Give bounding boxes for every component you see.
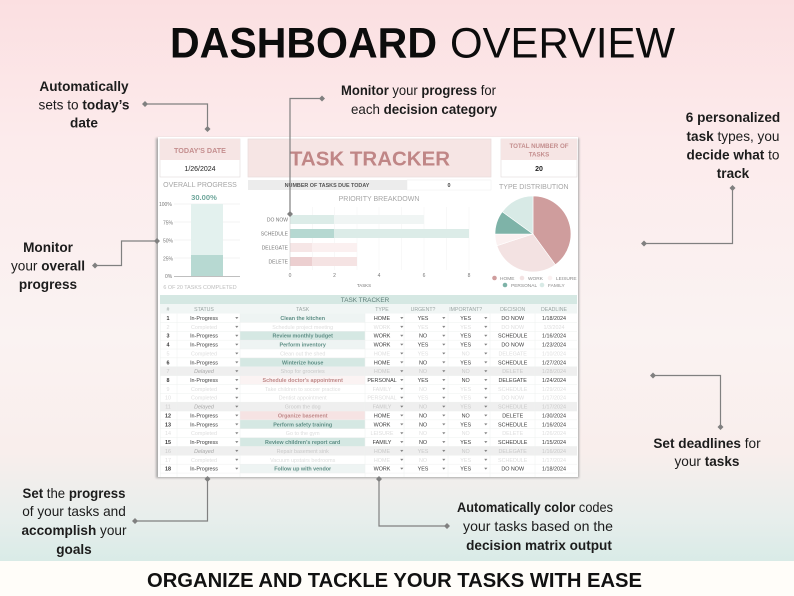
row 1: YES [460,316,471,322]
row 10: DO NOW [501,396,525,402]
total tasks card [501,139,577,177]
row 13: In-Progress [190,422,218,428]
type distribution pie chart: LEISURE [556,276,577,282]
priority breakdown chart: TASKS [357,283,371,288]
row 15: 15 [165,440,171,446]
row 14: NO [419,431,427,437]
callout: set progress: goals [56,542,92,557]
tracker title: TASK TRACKER [290,148,450,170]
row 1: Clean the kitchen [280,316,325,322]
row 7: HOME [374,369,390,375]
callout: task types: track [717,166,750,181]
row 1: 1/18/2024 [542,316,566,322]
table header row: URGENT? [411,307,436,313]
row 5: Clean out the shed [280,351,325,357]
overall progress chart: 50% [163,238,174,244]
row 17: Vacuum upstairs bedrooms [270,458,336,464]
callout: overall progress: your overall [11,258,85,274]
row 3: Review monthly budget [272,334,333,340]
row 15: YES [460,440,471,446]
overall progress chart: 6 OF 20 TASKS COMPLETED [163,285,237,291]
callout: decision category progress: Monitor your progress for [341,83,496,98]
row 16: NO [462,449,470,455]
row 16: YES [418,449,429,455]
row 12: NO [419,413,427,419]
row 18 [165,464,566,473]
row 5: 1/10/2024 [542,351,566,357]
table header row: IMPORTANT? [449,307,482,313]
row 11: SCHEDULE [498,405,528,411]
row 1 [166,314,566,322]
priority breakdown chart: 6 [423,273,426,279]
row 4: In-Progress [190,343,218,349]
arrow: today's date [142,101,210,132]
row 10: Completed [191,396,217,402]
callout: set progress: of your tasks and [22,504,126,519]
arrow: deadlines [650,372,724,430]
row 1: DO NOW [501,316,525,322]
row 4: WORK [374,343,391,349]
row 9: Completed [191,387,217,393]
row 7: 7 [166,369,170,375]
row 11: NO [419,405,427,411]
priority breakdown chart: DO NOW [267,218,288,224]
row 14: LEISURE [370,431,394,437]
callout: color codes: your tasks based on the [463,519,613,534]
tracker title [248,139,491,177]
priority breakdown chart: DELETE [269,260,289,266]
overall progress chart: 75% [163,220,174,226]
callout: today's date: sets to today’s [39,98,129,112]
row 4: YES [460,343,471,349]
total tasks card: 20 [535,166,543,173]
type distribution pie chart: FAMILY [548,283,566,289]
row 4: YES [418,343,429,349]
row 2: Schedule project meeting [272,325,333,331]
row 10: YES [418,396,429,402]
callout: overall progress [11,240,85,292]
row 16: DELEGATE [499,449,527,455]
row 16: 1/16/2024 [542,449,566,455]
table header row: DEADLINE [541,307,568,313]
row 6: NO [419,360,427,366]
row 13: Perform safety training [273,422,332,428]
row 18: Follow up with vendor [274,467,332,473]
total tasks card: TASKS [529,152,549,158]
row 18: DO NOW [501,467,525,473]
row 2 [166,325,564,331]
callout: task types: task types, you [687,129,779,144]
table title band: TASK TRACKER [341,297,390,304]
row 8: PERSONAL [367,378,397,384]
type distribution pie chart: TYPE DISTRIBUTION [499,184,569,191]
row 4 [166,340,566,349]
row 12: Organize basement [278,413,328,419]
row 18: 18 [165,467,171,473]
row 12: 1/30/2024 [542,413,566,419]
task tracker table [160,295,577,477]
table header row: TASK [296,307,310,313]
row 6: 1/27/2024 [542,360,566,366]
row 11: Delayed [194,405,215,411]
overall progress chart: 100% [159,202,172,208]
priority breakdown chart: 8 [468,273,471,279]
row 10: PERSONAL [367,396,397,402]
row 18: 1/18/2024 [542,467,566,473]
row 1: HOME [374,316,390,322]
type distribution pie chart [492,184,577,289]
row 7: NO [462,369,470,375]
callout: color codes [457,500,613,553]
total tasks card: TOTAL NUMBER OF [509,143,569,150]
row 8: 8 [166,378,170,384]
row 10: 10 [165,396,171,402]
row 9: 1/29/2024 [542,387,566,393]
row 3: WORK [374,334,391,340]
table header row: TYPE [375,307,389,313]
arrow: set progress [132,476,210,524]
title: DASHBOARD [170,20,437,68]
row 1: 1 [166,316,170,322]
tasks due today bar: NUMBER OF TASKS DUE TODAY [285,183,370,189]
row 14 [165,431,566,437]
row 17 [165,458,566,464]
callout: deadlines: your tasks [674,454,740,469]
today's date card: TODAY'S DATE [174,146,226,155]
priority breakdown chart: DELEGATE [262,246,289,252]
row 10: 1/17/2024 [542,396,566,402]
row 12: DELETE [502,413,524,419]
row 5: YES [418,351,429,357]
row 8: YES [418,378,429,384]
row 2: 1/3/2024 [544,325,564,331]
row 17: NO [419,458,427,464]
row 12: NO [462,413,470,419]
callout: overall progress: progress [19,277,77,292]
tasks due today bar [248,180,491,190]
row 6: 6 [166,360,170,366]
arrow: overall progress [92,238,160,268]
row 2: YES [418,325,429,331]
priority breakdown chart: 2 [333,273,336,279]
row 11: FAMILY [373,405,392,411]
row 6 [166,358,566,367]
row 3: In-Progress [190,334,218,340]
row 4: DO NOW [501,343,525,349]
row 16: Delayed [194,449,215,455]
type distribution pie chart: HOME [500,276,514,282]
row 15: SCHEDULE [498,440,528,446]
row 11: Groom the dog [285,405,321,411]
title: OVERVIEW [450,20,675,68]
tasks due today bar: 0 [448,183,450,189]
row 17: 1/17/2024 [542,458,566,464]
row 6: In-Progress [190,360,218,366]
row 12: In-Progress [190,413,218,419]
row 13 [165,420,566,429]
overall progress chart: 30.00% [191,193,217,202]
priority breakdown chart: SCHEDULE [261,232,289,238]
row 2: 2 [166,325,170,331]
row 6: SCHEDULE [498,360,528,366]
row 5: Completed [191,351,217,357]
row 11: 1/17/2024 [542,405,566,411]
row 13: 1/16/2024 [542,422,566,428]
row 13: YES [460,422,471,428]
row 9: YES [460,387,471,393]
row 7 [160,367,577,376]
bottom banner: ORGANIZE AND TACKLE YOUR TASKS WITH EASE [147,570,642,592]
row 14: 1/26/2024 [542,431,566,437]
today's date card: 1/26/2024 [184,166,216,173]
row 5: 5 [166,351,170,357]
table header row [160,304,577,314]
row 3: 3 [166,334,170,340]
callout: overall progress: Monitor [23,240,74,255]
row 13: NO [419,422,427,428]
row 5: DELEGATE [499,351,527,357]
row 10: YES [460,396,471,402]
row 11 [160,402,577,411]
row 2: YES [460,325,471,331]
row 9: NO [419,387,427,393]
row 11: 11 [165,405,171,411]
row 9: FAMILY [373,387,392,393]
table header row: STATUS [194,307,214,313]
row 1: YES [418,316,429,322]
row 12 [165,411,566,420]
row 5: HOME [374,351,390,357]
row 9: 9 [166,387,170,393]
arrow: decision category progress [287,96,325,217]
row 15: NO [419,440,427,446]
priority breakdown chart: 0 [289,273,292,279]
table title band [160,295,577,304]
overall progress chart: 25% [163,256,174,262]
row 8: DELEGATE [499,378,527,384]
row 2: DO NOW [501,325,525,331]
row 18: YES [418,467,429,473]
callout: deadlines [653,436,761,469]
row 15: Review children's report card [265,440,340,446]
row 4: 4 [166,343,170,349]
priority breakdown chart: PRIORITY BREAKDOWN [339,196,419,203]
bottom banner [0,561,794,596]
callout: set progress [21,486,127,557]
title [170,20,675,68]
row 3 [166,331,566,340]
callout: decision category progress [341,83,497,117]
row 4: 1/23/2024 [542,343,566,349]
arrow: color codes [376,476,450,529]
row 11: YES [460,405,471,411]
row 14: Completed [191,431,217,437]
row 15: In-Progress [190,440,218,446]
overall progress chart: OVERALL PROGRESS [163,182,237,189]
row 16: HOME [374,449,390,455]
today's date card [160,139,240,177]
row 16: 16 [165,449,171,455]
row 2: Completed [191,325,217,331]
row 10 [165,396,566,402]
row 17: 17 [165,458,171,464]
row 14: 14 [165,431,171,437]
row 17: HOME [374,458,390,464]
callout: color codes: Automatically color codes [457,500,613,515]
row 7: Delayed [194,369,215,375]
callout: today's date: date [70,116,98,130]
dashboard screenshot [156,137,579,478]
callout: set progress: accomplish your [21,523,127,538]
callout: today's date: Automatically [39,79,129,94]
priority breakdown chart [261,196,471,288]
row 8: 1/24/2024 [542,378,566,384]
row 7: NO [419,369,427,375]
row 2: WORK [374,325,391,331]
type distribution pie chart: WORK [528,276,544,282]
priority breakdown chart: 4 [378,273,381,279]
table header row: DECISION [500,307,525,313]
callout: task types: 6 personalized [686,110,780,125]
callout: color codes: decision matrix output [466,538,612,553]
row 7: DELETE [502,369,524,375]
row 7: 1/28/2024 [542,369,566,375]
row 18: WORK [374,467,391,473]
row 3: YES [460,334,471,340]
row 6: Winterize house [282,360,323,366]
table header row: # [167,307,170,313]
row 5: NO [462,351,470,357]
row 17: YES [460,458,471,464]
row 13: WORK [374,422,391,428]
row 15 [165,438,566,446]
row 3: 1/16/2024 [542,334,566,340]
row 16 [160,446,577,455]
row 14: NO [462,431,470,437]
row 8 [166,376,566,384]
row 1: In-Progress [190,316,218,322]
row 10: Dentist appointment [279,396,327,402]
type distribution pie chart: PERSONAL [511,283,537,289]
row 4: Perform inventory [279,343,326,349]
row 8: NO [462,378,470,384]
row 17: SCHEDULE [498,458,528,464]
row 7: Shop for groceries [281,369,325,375]
row 15: FAMILY [373,440,392,446]
callout: today's date [39,79,129,130]
row 12: 12 [165,413,171,419]
row 18: In-Progress [190,467,218,473]
row 5 [166,351,566,357]
row 14: Go to the gym [286,431,320,437]
callout: task types: decide what to [687,148,779,162]
row 13: 13 [165,422,171,428]
row 12: HOME [374,413,390,419]
callout: task types [686,110,780,181]
row 9: Take children to soccer practice [265,387,340,393]
row 16: Repair basement sink [277,449,329,455]
callout: set progress: Set the progress [22,486,126,501]
row 18: YES [460,467,471,473]
overall progress chart: 0% [165,274,173,280]
row 8: Schedule doctor's appointment [263,378,343,384]
overall progress chart [159,182,240,291]
row 14: DELETE [502,431,524,437]
row 8: In-Progress [190,378,218,384]
row 9 [166,387,566,393]
row 6: YES [460,360,471,366]
row 15: 1/15/2024 [542,440,566,446]
row 3: SCHEDULE [498,334,528,340]
row 13: SCHEDULE [498,422,528,428]
row 6: HOME [374,360,390,366]
callout: deadlines: Set deadlines for [653,436,761,451]
arrow: task types [641,185,736,246]
row 3: NO [419,334,427,340]
row 9: SCHEDULE [498,387,528,393]
callout: decision category progress: each decision category [351,102,497,117]
row 17: Completed [191,458,217,464]
